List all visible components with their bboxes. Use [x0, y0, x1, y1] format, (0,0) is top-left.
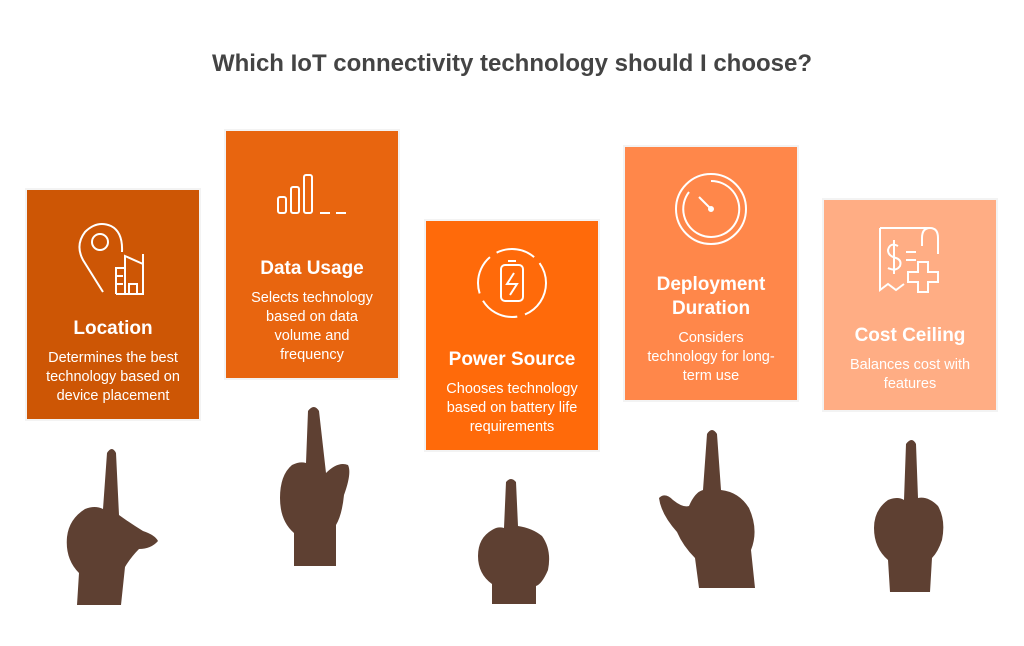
panel: deployment duration: Considers — [678, 330, 744, 346]
panel: cost ceiling: Balances cost with features — [850, 357, 970, 392]
panel: power source: Power Source — [449, 349, 575, 370]
hand: cost ceiling — [874, 440, 944, 592]
icon: bill with plus — [879, 227, 939, 293]
panel: location — [27, 190, 199, 419]
panel: deployment duration: Duration — [672, 298, 750, 319]
title: Which IoT connectivity technology should I choose? — [212, 50, 812, 77]
panel: data usage: Selects technology based on data volume and frequency — [251, 290, 373, 363]
hand: location — [66, 449, 158, 605]
panel: location: Determines the best technology based on device placement — [46, 350, 180, 404]
icon: gauge clock — [675, 173, 747, 245]
hand: data usage — [280, 407, 350, 566]
panel: power source: Chooses technology based on battery life requirements — [446, 381, 578, 435]
hand: deployment duration — [659, 430, 755, 588]
panel: deployment duration: term use — [683, 368, 739, 384]
panel: cost ceiling: Cost Ceiling — [855, 325, 965, 346]
panel: data usage — [226, 131, 398, 378]
panel: deployment duration — [625, 147, 797, 400]
icon: bar signal — [277, 174, 346, 214]
panel: deployment duration: technology for long- — [647, 349, 775, 365]
panel: deployment duration: Deployment — [657, 274, 765, 295]
panel: data usage: Data Usage — [260, 258, 364, 279]
panel: location: Location — [73, 318, 153, 339]
hand: power source — [478, 479, 550, 604]
icon: battery — [477, 248, 547, 318]
panel: cost ceiling — [824, 200, 996, 410]
panel: power source — [426, 221, 598, 450]
icon: location pin with buildings — [78, 223, 144, 295]
